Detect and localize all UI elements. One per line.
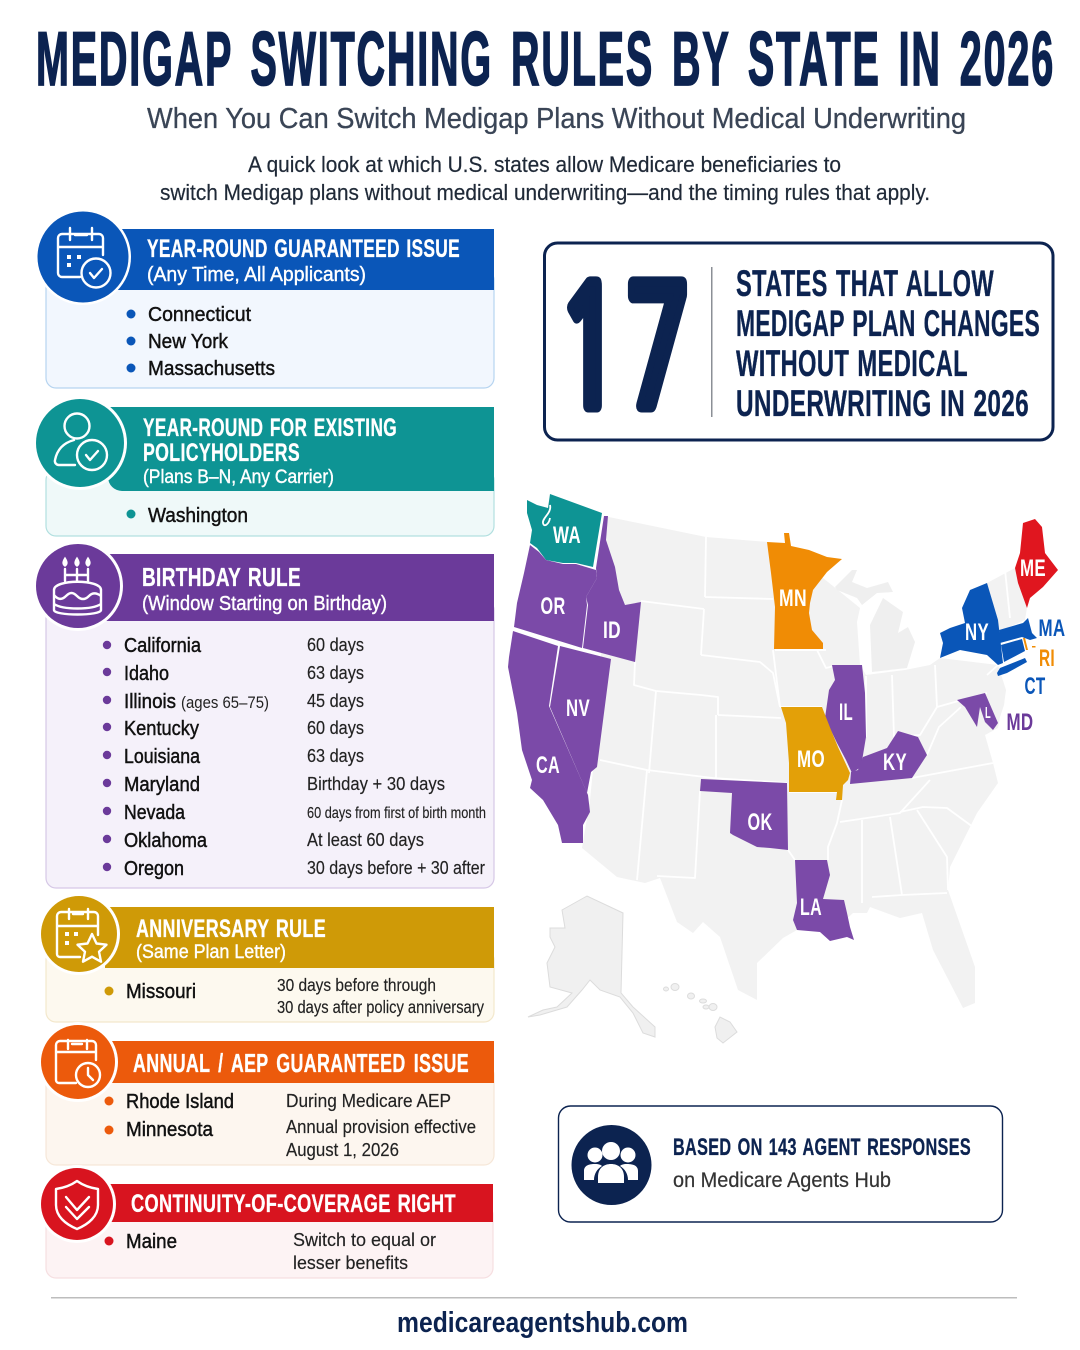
intro text: switch Medigap plans without medical underwriting—and the timing rules that apply. (160, 180, 930, 205)
panel: year-round for existing policyholders (33, 396, 494, 536)
list: states and windows: Nevada (124, 802, 186, 824)
list: states and windows: 60 days (307, 635, 364, 655)
list: states and windows: 63 days (307, 746, 364, 766)
state: Kentucky: KY (883, 749, 907, 776)
state: Maryland (957, 693, 1034, 736)
inset: Alaska (528, 896, 655, 1037)
state: Missouri (781, 707, 850, 800)
subtitle: When You Can Switch Medigap Plans Without Medical Underwriting (147, 103, 966, 135)
list: states and windows: Oregon (124, 858, 184, 880)
list: state and right: Maine (126, 1231, 177, 1253)
state: Kentucky (850, 731, 927, 784)
state: Oregon: OR (540, 593, 566, 620)
footer url: medicareagentshub.com (397, 1307, 688, 1339)
state: Connecticut: CT (1024, 673, 1046, 700)
panel: annual AEP guaranteed issue (38, 1022, 494, 1165)
list: states: Washington (148, 505, 248, 527)
list: states and timing: August 1, 2026 (286, 1140, 399, 1160)
panel header: existing policyholders: POLICYHOLDERS (143, 439, 300, 467)
icon: calendar with star (38, 893, 120, 975)
panel header: anniversary rule (105, 907, 494, 968)
list: states and windows: California (124, 635, 202, 657)
state: Massachusetts: MA (1038, 615, 1066, 642)
state: Minnesota: MN (779, 585, 807, 612)
list: states and windows: Birthday + 30 days (307, 774, 445, 794)
state: Maryland: MD (1006, 709, 1034, 736)
US map (508, 494, 1066, 1043)
state: Massachusetts (999, 615, 1066, 643)
callout text (673, 1134, 971, 1192)
panel header: anniversary rule: (Same Plan Letter) (136, 942, 286, 963)
list: states and windows: 60 days (307, 718, 364, 738)
state: Rhode Island (1023, 638, 1055, 672)
state: Washington (527, 494, 602, 567)
panel header: existing policyholders: (Plans B–N, Any Carrier) (143, 467, 334, 488)
intro text: A quick look at which U.S. states allow Medicare beneficiaries to (248, 152, 841, 177)
list: state and window (104, 975, 484, 1017)
list: states and windows: 30 days before + 30 after (307, 858, 485, 878)
icon: calendar with clock (38, 1022, 118, 1102)
state: Oklahoma (700, 779, 788, 850)
state: Louisiana: LA (800, 894, 822, 921)
state: Missouri: MO (797, 746, 825, 773)
state: Connecticut (1001, 639, 1046, 700)
panel: anniversary rule (38, 893, 494, 1022)
list: states and windows: Illinois (124, 691, 176, 713)
list: state and window: 30 days before through (277, 975, 436, 995)
list: state and right: Switch to equal or (293, 1230, 436, 1250)
state: Illinois: IL (839, 699, 853, 726)
big number 17: 17 (556, 267, 692, 432)
list: states and windows: Kentucky (124, 718, 199, 740)
list: states: New York (148, 331, 229, 353)
icon: group of people (572, 1125, 652, 1205)
list: state and window: 30 days after policy anniversary (277, 997, 484, 1017)
icon: shield with check (38, 1165, 116, 1243)
list: states and timing: Minnesota (126, 1119, 214, 1141)
list: states and windows (103, 635, 486, 880)
icon: birthday cake (33, 541, 123, 631)
list: states and windows: Maryland (124, 774, 200, 796)
state: Idaho: ID (603, 617, 621, 644)
panel header: existing policyholders (108, 407, 494, 491)
list: states and windows: Louisiana (124, 746, 201, 768)
state: Minnesota (767, 533, 842, 649)
panel header: annual AEP (108, 1041, 494, 1083)
list: states and windows: 60 days from first of birth month (307, 805, 486, 822)
icon: person with check (33, 396, 127, 490)
state: Oklahoma: OK (748, 809, 773, 836)
list: states and timing: Rhode Island (126, 1091, 234, 1113)
state: Washington: WA (553, 522, 581, 549)
inset: Hawaii (664, 984, 737, 1043)
list: states and windows: 63 days (307, 663, 364, 683)
list: states and windows: (ages 65–75) (181, 694, 269, 712)
state: Nevada: NV (566, 695, 590, 722)
panel: birthday rule (33, 541, 494, 888)
list: states and windows: Oklahoma (124, 830, 208, 852)
list: states and windows: Idaho (124, 663, 169, 685)
callout text: on Medicare Agents Hub (673, 1169, 891, 1192)
panel header: year-round guaranteed issue: (Any Time, All Applicants) (147, 264, 366, 286)
panel header: continuity of coverage: CONTINUITY-OF-COVERAGE RIGHT (131, 1190, 456, 1218)
panel: continuity-of-coverage right (38, 1165, 493, 1278)
state: New York (940, 583, 1027, 676)
state: Idaho (583, 516, 641, 662)
list: states and timing: During Medicare AEP (286, 1091, 451, 1111)
state: California: CA (536, 752, 560, 779)
state: Maine: ME (1020, 555, 1046, 582)
panel header: year-round guaranteed issue: YEAR-ROUND GUARANTEED ISSUE (147, 235, 460, 263)
list: states and timing (104, 1091, 476, 1160)
state: New York: NY (965, 619, 989, 646)
base map: non-highlighted states (582, 516, 1027, 1008)
state: Maryland: L (985, 705, 991, 722)
list: states and timing: Annual provision effective (286, 1117, 476, 1137)
panel header: continuity of coverage (105, 1184, 493, 1222)
state: Illinois (825, 665, 866, 773)
state: California (508, 631, 590, 843)
panel header: year-round guaranteed issue (118, 229, 494, 290)
panel: year-round guaranteed issue (35, 209, 494, 388)
state: Rhode Island: RI (1039, 645, 1055, 672)
panel header: birthday rule (105, 554, 494, 621)
state: Maine (1015, 519, 1058, 608)
panel header: annual AEP: ANNUAL / AEP GUARANTEED ISSUE (133, 1048, 469, 1078)
state: Oregon (514, 545, 597, 648)
panel header: existing policyholders: YEAR-ROUND FOR EXISTING (143, 414, 397, 442)
list: state and right: lesser benefits (293, 1253, 408, 1273)
list: states: Connecticut (148, 304, 251, 326)
list: states (126, 304, 275, 380)
callout: 17 states (544, 243, 1053, 440)
list: state and window: Missouri (126, 981, 196, 1003)
callout text (736, 263, 1040, 424)
panel header: birthday rule: (Window Starting on Birthday) (142, 593, 387, 615)
list: states and windows: 45 days (307, 691, 364, 711)
list: states and windows: At least 60 days (307, 830, 424, 850)
icon: calendar with check (35, 209, 131, 305)
callout: agent responses (558, 1106, 1002, 1222)
list: state and right (104, 1230, 436, 1273)
panel header: anniversary rule: ANNIVERSARY RULE (136, 915, 326, 943)
state: Louisiana (793, 860, 854, 941)
panel header: birthday rule: BIRTHDAY RULE (142, 562, 301, 592)
state: Nevada (550, 646, 611, 793)
intro text (160, 152, 930, 205)
list: states: Massachusetts (148, 358, 275, 380)
